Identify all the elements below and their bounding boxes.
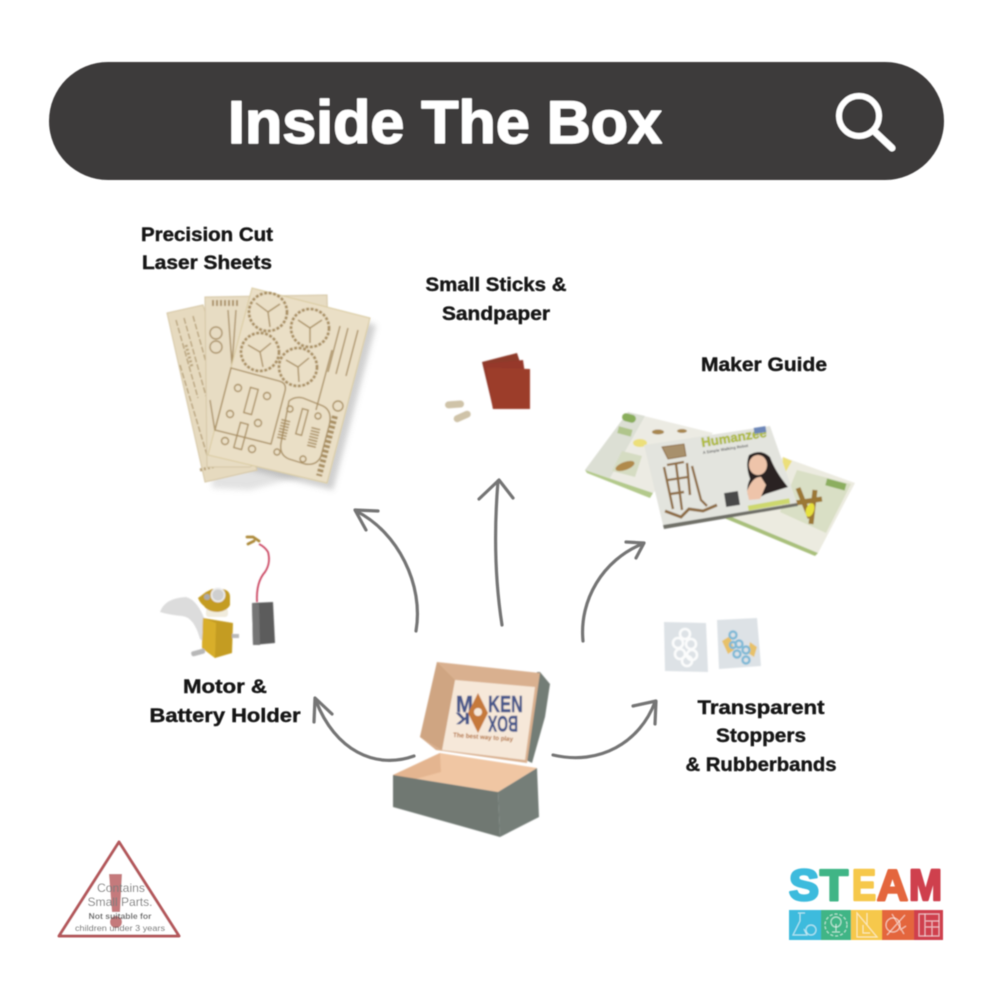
arrow: box to motor and battery <box>314 698 414 760</box>
steam wordmark: T <box>820 861 848 910</box>
illustration: maker guide booklets <box>585 412 855 556</box>
label: small sticks and sandpaper: Sandpaper <box>442 304 551 325</box>
illustration: open box <box>393 662 550 837</box>
warning text: children under 3 years <box>75 923 165 933</box>
illustration: stoppers and rubberbands bags <box>664 618 761 672</box>
steam wordmark: M <box>909 861 942 910</box>
warning text: Not suitable for <box>88 911 152 921</box>
illustration: maker guide booklets: A Simple Walking Robot <box>702 443 749 455</box>
illustration: motor and battery holder <box>160 537 275 658</box>
arrow: box to maker guide <box>583 542 644 641</box>
box lid logo: K <box>455 709 470 726</box>
illustration: laser sheets <box>167 288 376 490</box>
label: transparent stoppers and rubberbands: & Rubberbands <box>686 755 836 776</box>
label: small sticks and sandpaper: Small Sticks & <box>426 275 567 296</box>
label: motor and battery holder <box>150 677 301 727</box>
label: transparent stoppers and rubberbands <box>686 698 836 776</box>
arrow: box to laser sheets <box>355 510 417 631</box>
logo: steam <box>789 861 943 940</box>
label: precision cut laser sheets <box>141 225 274 274</box>
booklet robot model <box>662 444 717 517</box>
exclamation mark <box>109 874 122 928</box>
label: small sticks and sandpaper <box>426 275 567 325</box>
search bar header <box>49 62 944 180</box>
box lid logo: BOX <box>488 711 518 736</box>
warning text: Small Parts. <box>88 895 152 909</box>
title: Inside The Box <box>228 89 662 156</box>
steam wordmark <box>789 861 942 910</box>
label: transparent stoppers and rubberbands: Transparent <box>698 698 825 719</box>
warning text <box>75 881 165 933</box>
warning text: Contains <box>97 881 145 895</box>
illustration: sticks and sandpaper <box>445 353 530 423</box>
label: maker guide: Maker Guide <box>701 355 827 376</box>
label: motor and battery holder: Motor & <box>183 677 267 698</box>
box lid logo: The best way to play <box>453 732 514 743</box>
box lid logo: M <box>456 691 473 717</box>
box lid logo <box>453 691 523 743</box>
sheet cut pattern: gears <box>215 293 358 476</box>
illustration: maker guide booklets: Humanzee <box>700 425 768 450</box>
arrow: box to sticks and sandpaper <box>479 480 513 625</box>
label: precision cut laser sheets: Laser Sheets <box>142 253 272 274</box>
box lid logo: KEN <box>488 691 523 717</box>
steam wordmark: A <box>877 861 908 910</box>
label: precision cut laser sheets: Precision Cut <box>141 225 274 246</box>
steam wordmark: S <box>789 861 819 910</box>
label: motor and battery holder: Battery Holder <box>150 706 301 727</box>
steam wordmark: E <box>852 861 876 910</box>
steam icon blocks <box>789 910 943 940</box>
arrow: box to stoppers and rubberbands <box>553 701 656 758</box>
warning: small parts <box>59 842 179 936</box>
icon: magnifying glass <box>839 96 892 148</box>
label: transparent stoppers and rubberbands: Stoppers <box>716 726 806 747</box>
